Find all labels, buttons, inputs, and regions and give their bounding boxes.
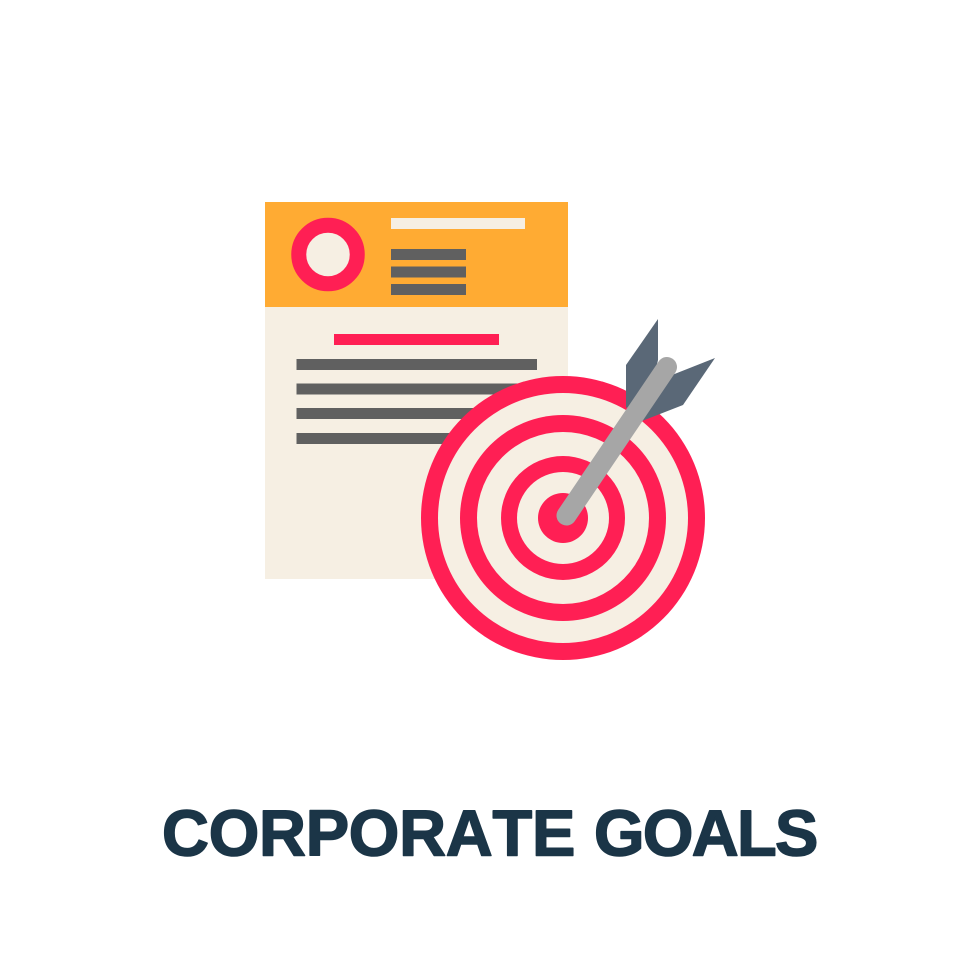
title: GOALS	[594, 797, 817, 870]
arrow shaft	[566, 367, 667, 516]
header title bar	[391, 218, 525, 229]
icon: arrow	[566, 319, 715, 516]
document heading bar	[334, 334, 499, 345]
icon: target	[421, 376, 705, 660]
header text lines	[391, 249, 466, 295]
document text lines	[296, 359, 537, 444]
arrow fletching right	[642, 358, 715, 421]
avatar circle	[299, 225, 357, 284]
icon: document	[265, 202, 568, 579]
document header band	[265, 202, 568, 307]
title: CORPORATE	[162, 797, 575, 870]
document body	[265, 307, 568, 579]
arrow fletching left	[626, 319, 658, 408]
